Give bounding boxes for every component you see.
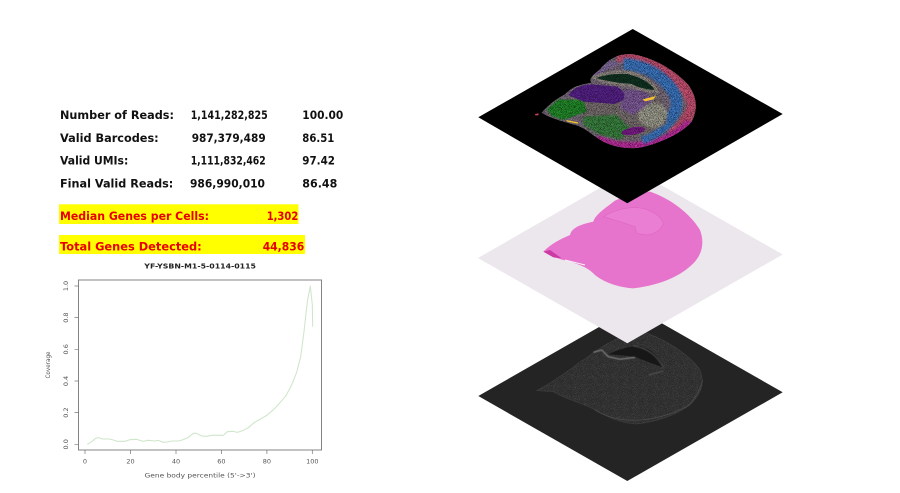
row: final valid reads: 986,990,010 xyxy=(190,176,265,190)
coverage line xyxy=(87,286,313,444)
row: final valid reads xyxy=(60,176,337,190)
cluster: upper lilac xyxy=(592,60,620,76)
callout: total genes detected xyxy=(59,235,305,254)
row: final valid reads: Final Valid Reads: xyxy=(60,176,173,190)
y axis tick labels: 0.0 xyxy=(62,439,70,449)
row: number of reads xyxy=(60,108,343,122)
row: valid UMIs: 1,111,832,462 xyxy=(191,154,266,168)
cluster: green xyxy=(547,99,587,120)
row: valid barcodes: Valid Barcodes: xyxy=(60,131,159,145)
row: valid UMIs: 97.42 xyxy=(302,154,335,168)
y axis tick labels: 1.0 xyxy=(62,281,70,291)
cluster: mid tissue xyxy=(582,94,668,140)
x axis tick labels: 100 xyxy=(306,458,319,466)
row: number of reads: Number of Reads: xyxy=(60,108,174,122)
y axis tick labels: 0.2 xyxy=(62,407,70,418)
row: valid UMIs xyxy=(60,154,335,168)
chart title: YF-YSBN-M1-5-0114-0115 xyxy=(143,261,256,270)
callout: median genes per cell xyxy=(59,204,298,224)
H&E tissue section xyxy=(543,192,702,288)
x axis tick labels: 20 xyxy=(126,458,135,466)
callout: median genes per cell: Median Genes per Cells: xyxy=(60,209,209,223)
layer: grayscale tissue image xyxy=(478,307,783,481)
callout: median genes per cell: 1,302 xyxy=(267,209,298,223)
x axis tick labels: 40 xyxy=(172,458,180,466)
axis ticks xyxy=(74,286,312,454)
y axis tick labels: 0.6 xyxy=(62,344,70,354)
x axis label: Gene body percentile (5'->3') xyxy=(144,472,256,480)
callout: total genes detected: 44,836 xyxy=(263,239,304,253)
cluster: purple xyxy=(568,84,624,104)
row: valid barcodes: 987,379,489 xyxy=(192,131,266,145)
x axis tick labels: 80 xyxy=(263,458,271,466)
y axis tick labels: 0.4 xyxy=(62,376,70,386)
stray cells xyxy=(535,113,539,115)
cluster: lilac xyxy=(620,90,653,115)
row: valid barcodes: 86.51 xyxy=(302,131,334,145)
highlight: yellow clusters xyxy=(566,96,656,124)
callout: total genes detected: Total Genes Detected: xyxy=(60,239,202,253)
y axis label: Coverage xyxy=(44,352,52,378)
cluster: light gray xyxy=(638,102,667,128)
x axis tick labels: 0 xyxy=(83,458,87,466)
layer: H&E stained tissue xyxy=(478,169,783,343)
cluster: magenta patch xyxy=(622,126,646,136)
x axis tick labels: 60 xyxy=(217,458,226,466)
y axis tick labels xyxy=(62,281,70,449)
layer: spatial cell clusters xyxy=(478,29,783,203)
speckle xyxy=(540,53,700,150)
cluster: hippocampus xyxy=(591,70,659,93)
row: number of reads: 1,141,282,825 xyxy=(191,108,268,122)
tissue outline in grayscale xyxy=(536,332,703,424)
cluster: outer cortex xyxy=(617,57,693,135)
plot frame xyxy=(78,280,322,450)
y axis tick labels: 0.8 xyxy=(62,312,70,323)
x axis tick labels xyxy=(83,458,319,466)
cluster: blue cortical layer xyxy=(623,64,677,138)
clustered tissue map xyxy=(535,53,700,150)
chart: gene body coverage xyxy=(44,261,322,480)
row: number of reads: 100.00 xyxy=(302,108,343,122)
row: valid UMIs: Valid UMIs: xyxy=(60,154,128,168)
table: read statistics xyxy=(60,108,343,190)
row: final valid reads: 86.48 xyxy=(302,176,337,190)
row: valid barcodes xyxy=(60,131,334,145)
